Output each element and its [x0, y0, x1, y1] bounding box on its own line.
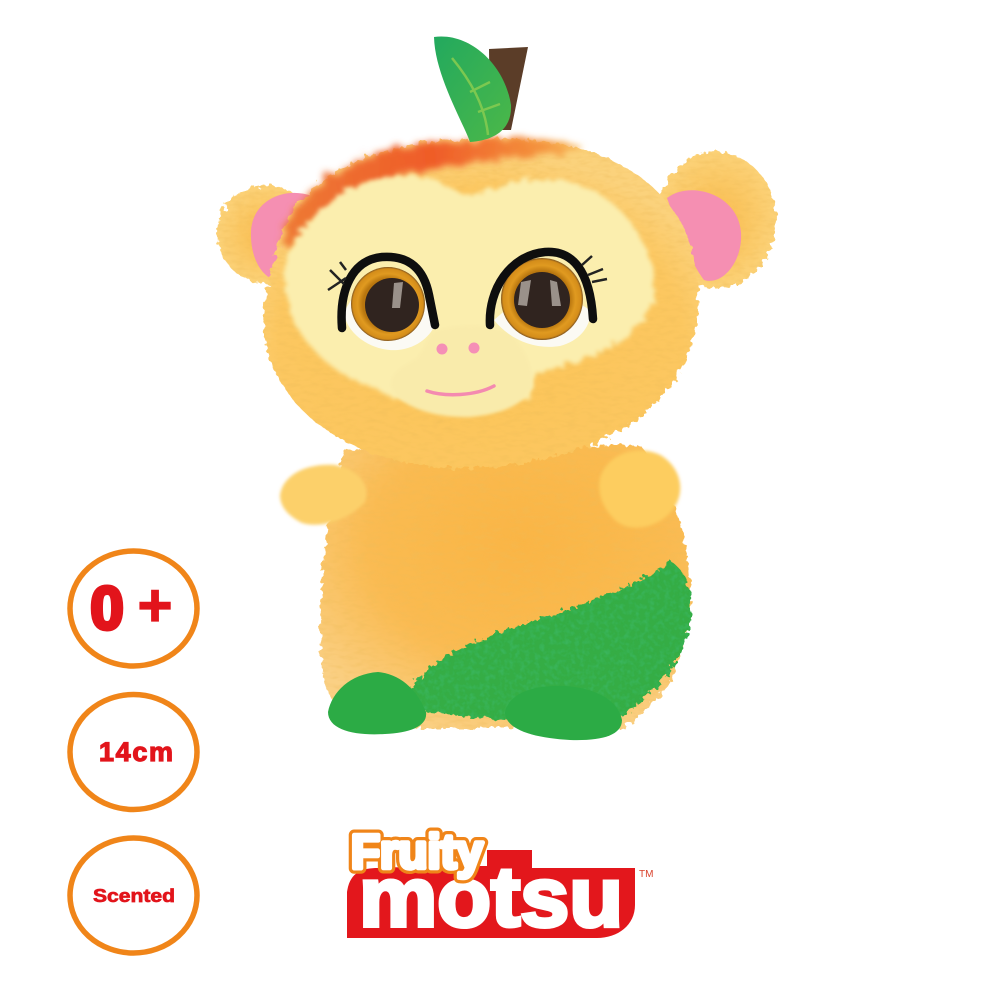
ear right	[656, 152, 776, 288]
nostrils and mouth	[427, 342, 494, 395]
left eye	[328, 257, 436, 350]
age text: +	[137, 572, 173, 639]
head	[264, 139, 698, 468]
logo word Fruity: Fruity	[351, 826, 483, 879]
arm left	[280, 465, 366, 525]
plush toy	[217, 36, 776, 740]
right eye	[490, 252, 607, 347]
foot right	[505, 686, 622, 740]
body green fur	[398, 562, 691, 720]
face cream	[284, 176, 654, 398]
arm right	[599, 451, 680, 528]
apple blush	[280, 138, 585, 250]
age text: 0	[90, 575, 124, 642]
stem	[489, 47, 528, 130]
logo word Fruity: Fruity	[351, 826, 483, 879]
badge: scented	[70, 838, 197, 953]
scented text: Scented	[93, 886, 175, 906]
logo red backing	[347, 850, 635, 938]
foot left	[328, 672, 426, 734]
muzzle	[391, 325, 532, 417]
logo: Fruity motsu	[347, 826, 653, 944]
leaf	[434, 36, 511, 142]
body	[320, 445, 691, 728]
badge: size 14cm	[70, 694, 197, 810]
badge: age 0+	[70, 551, 197, 666]
logo word motsu: motsu	[359, 850, 623, 944]
size text: 14cm	[99, 737, 173, 767]
ear left	[217, 185, 315, 283]
trademark: TM	[639, 869, 653, 880]
